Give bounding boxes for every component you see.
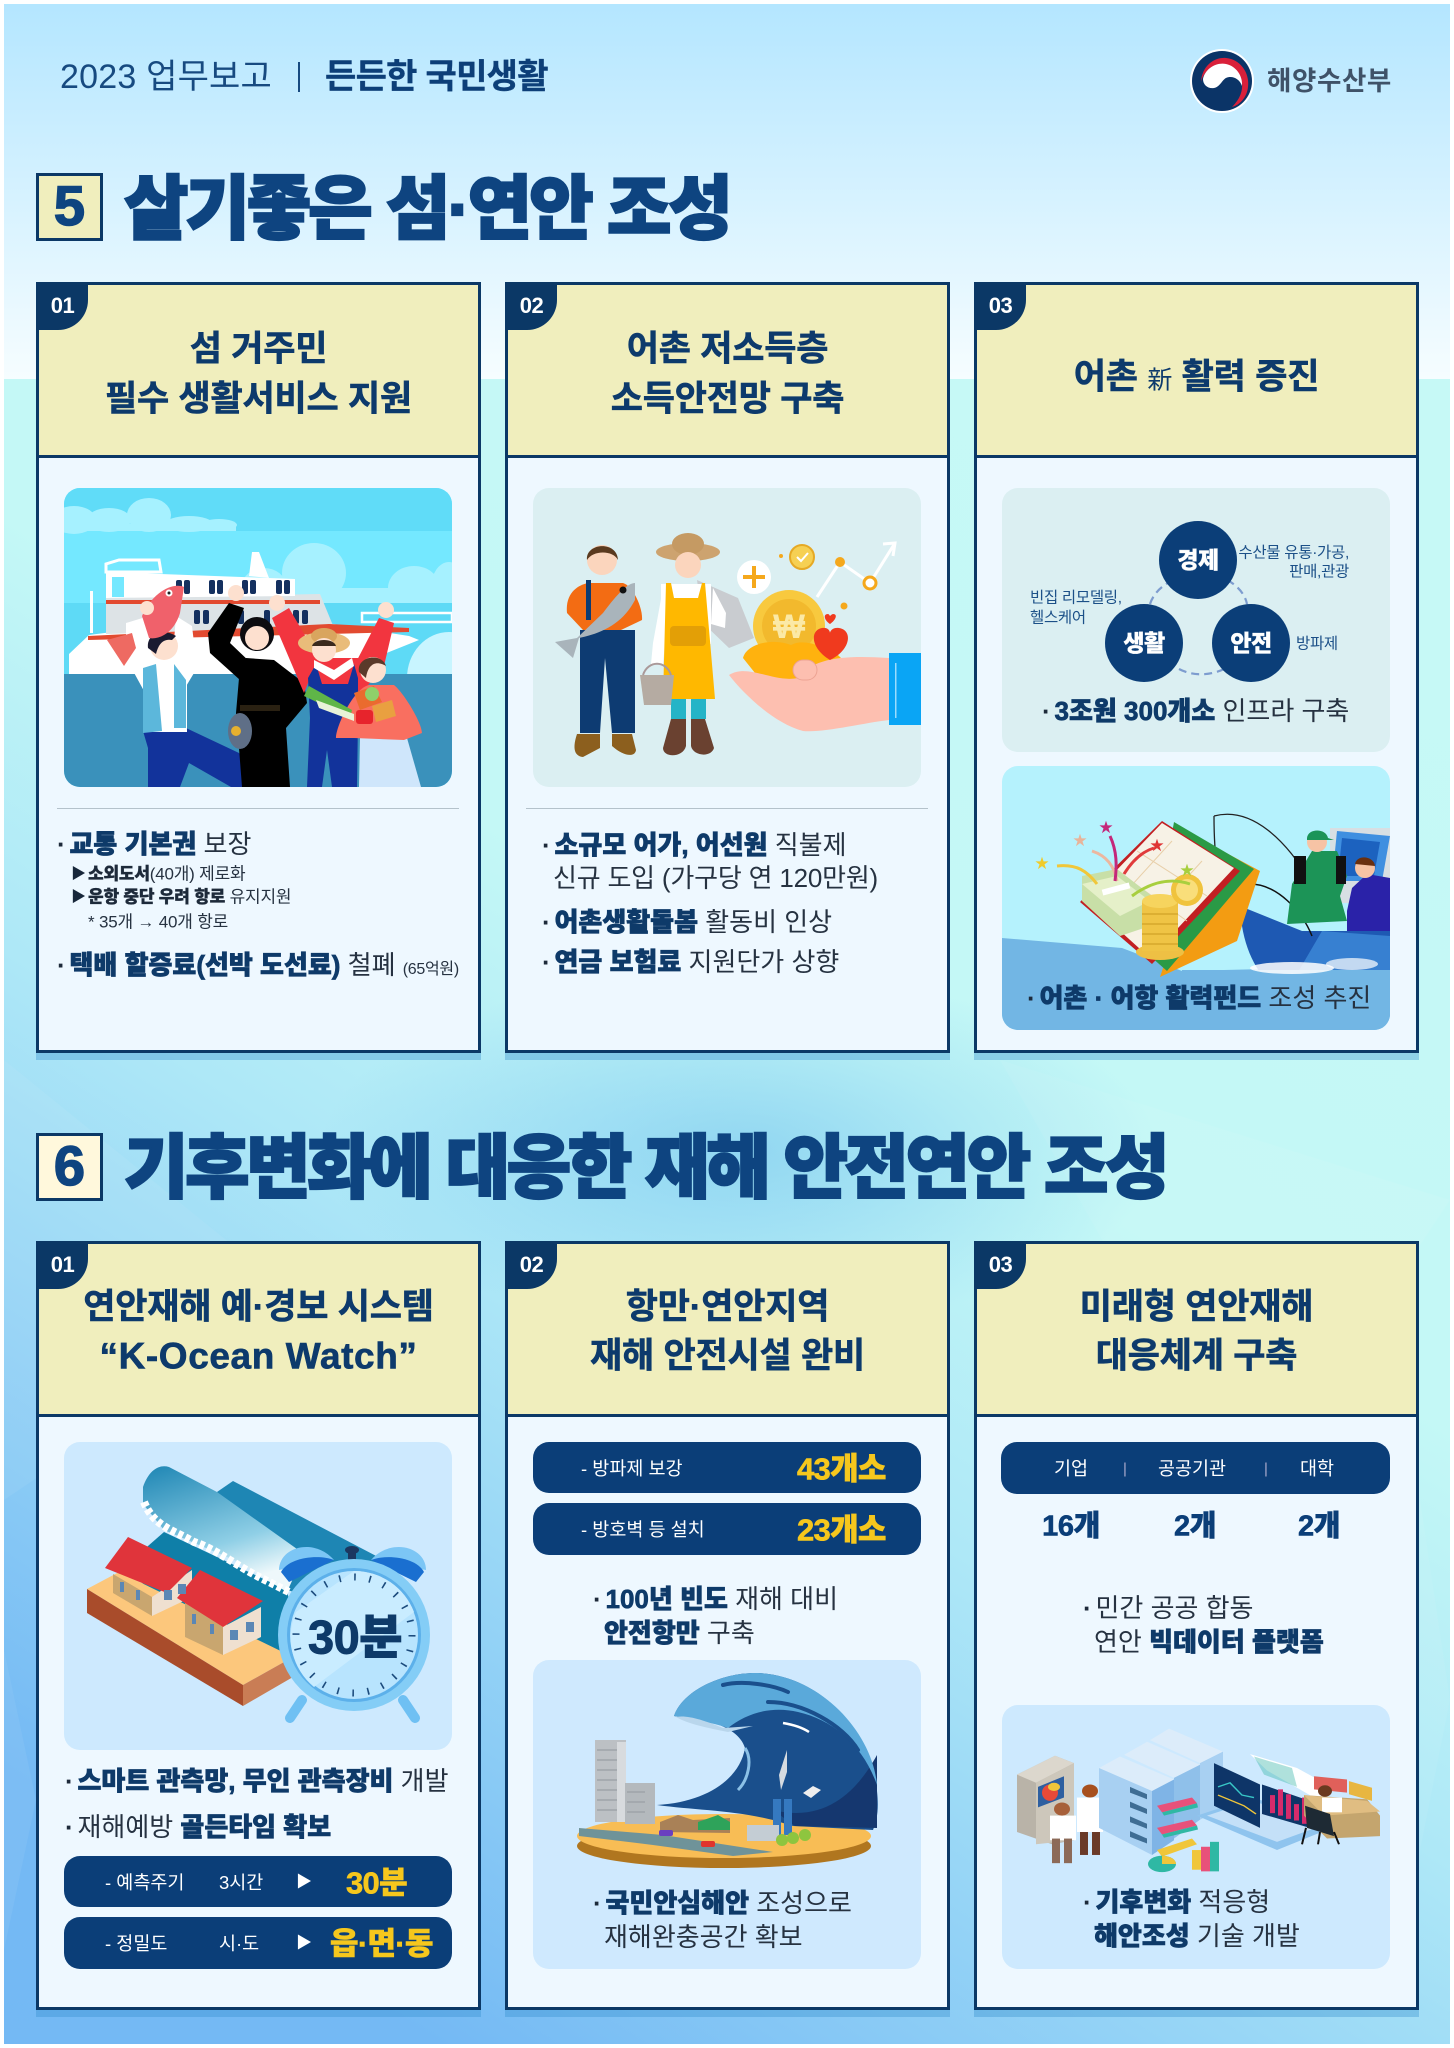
console and scientists <box>1017 1756 1103 1863</box>
bullet: 골든타임: · <box>65 1812 74 1842</box>
top label: 든든한 국민생활: 든든한 국민생활 <box>325 58 548 96</box>
bullet: 어촌생활돌봄: · <box>542 907 551 937</box>
to value: 30분 <box>346 1865 407 1900</box>
bullet: 교통 기본권 보장: 교통 기본권 보장 <box>70 829 251 859</box>
person: fisher with red fish <box>107 586 242 787</box>
badge 02 <box>505 1241 557 1289</box>
note: 35개 to 40개: * 35개 → 40개 항로 <box>88 912 228 932</box>
panel header <box>505 282 950 458</box>
value: 23개소 <box>797 1512 886 1548</box>
panel title line 2: 대응체계 구축 <box>1096 1336 1297 1376</box>
top label separator <box>298 62 300 92</box>
bullet: 100년 빈도: 100년 빈도 재해 대비 <box>606 1584 838 1614</box>
section 5 number: 5 <box>54 174 85 237</box>
label 기업: 기업 <box>1054 1458 1088 1479</box>
bullet: 100년 빈도: · <box>593 1584 602 1614</box>
bullet: 택배 할증료 철폐: · <box>57 950 66 980</box>
panel header <box>36 1241 481 1417</box>
circle: 안전: 안전 <box>1230 630 1272 656</box>
illustration: islanders in front of ferry <box>64 488 452 787</box>
circle: 경제 <box>1159 521 1237 599</box>
panel: 6-03 future response <box>974 1241 1419 2017</box>
bullet: 택배 할증료 철폐: 택배 할증료(선박 도선료) 철폐 (65억원) <box>70 950 459 980</box>
sub item: 소외도서 제로화: ▶ <box>71 866 86 882</box>
server racks <box>1099 1729 1223 1872</box>
diagram card: economy, life, safety <box>1002 488 1390 752</box>
ministry logo <box>1190 49 1392 113</box>
panel header <box>505 1241 950 1417</box>
houses <box>105 1537 263 1655</box>
analyst at desk <box>1302 1776 1380 1844</box>
bullet: 연금 보험료: · <box>542 947 551 977</box>
label 공공기관: 공공기관 <box>1158 1458 1226 1479</box>
count: 2개: 2개 <box>1174 1510 1216 1542</box>
bar: 정밀도 <box>64 1917 452 1969</box>
panel: 5-03 new vitality <box>974 282 1419 1060</box>
panel: 5-02 income safety net <box>505 282 950 1060</box>
wallet and money: ★ <box>1149 836 1165 855</box>
badge 03: 03 <box>989 1252 1012 1277</box>
laptop and charts <box>1197 1754 1342 1850</box>
label: - 방파제 보강 <box>581 1457 683 1478</box>
badge 01: 01 <box>51 293 74 318</box>
bullet: 어촌생활돌봄: 어촌생활돌봄 활동비 인상 <box>554 907 832 937</box>
bullet: 민간 공공 합동: 민간 공공 합동 <box>1096 1593 1253 1623</box>
sub item: 항로 유지지원: 운항 중단 우려 항로 유지지원 <box>88 888 291 906</box>
panel title line 1: 연안재해 예·경보 시스템 <box>83 1288 434 1326</box>
label: - 정밀도 <box>105 1933 167 1954</box>
count: 16개: 16개 <box>1042 1510 1100 1542</box>
bullet: 골든타임: 재해예방 골든타임 확보 <box>78 1812 331 1842</box>
panel title line 1: 미래형 연안재해 <box>1080 1288 1313 1326</box>
panel: 5-01 island residents <box>36 282 481 1060</box>
label: 수산물: 수산물 유통·가공, <box>1238 544 1349 561</box>
bullet continuation: 신규 도입 (가구당 연 120만원) <box>553 863 878 893</box>
land <box>87 1572 293 1706</box>
illustration: tsunami, houses and alarm clock <box>64 1442 452 1750</box>
ministry name: 해양수산부 <box>1267 66 1392 96</box>
caption: 3조원 300개소: 3조원 300개소 인프라 구축 <box>1054 696 1349 726</box>
label: - 예측주기 <box>105 1871 184 1892</box>
caption: 어촌 어항 활력펀드: · <box>1027 983 1036 1013</box>
circle: 생활: 생활 <box>1123 630 1165 656</box>
wallet and money: ★ <box>1179 861 1195 880</box>
caption continuation: 해안조성 기술 개발 <box>1094 1921 1300 1951</box>
from value: 시·도 <box>219 1933 259 1954</box>
bullet: 민간 공공 합동: · <box>1083 1593 1092 1623</box>
illustration: giant wave over coastal city <box>533 1660 921 1969</box>
bullet: 스마트 관측망: · <box>65 1766 74 1796</box>
circle: 경제: 경제 <box>1177 547 1219 573</box>
dashed links <box>1149 581 1248 676</box>
caption continuation: 재해완충공간 확보 <box>604 1922 803 1952</box>
bar: 예측주기 <box>64 1856 452 1907</box>
divider <box>526 808 928 809</box>
wallet and money: ★ <box>1098 818 1114 837</box>
section 6 title: 기후변화에 대응한 재해 안전연안 조성 <box>124 1129 1166 1207</box>
circle: 생활 <box>1105 604 1183 682</box>
person: woman with vegetables <box>304 657 422 787</box>
caption: 기후변화 적응형: 기후변화 적응형 <box>1096 1887 1270 1917</box>
badge 01 <box>36 1241 88 1289</box>
panel title line 1: 어촌 저소득층 <box>627 330 828 368</box>
divider <box>57 808 459 809</box>
woman with bucket and net <box>640 533 754 755</box>
panel header <box>974 1241 1419 1417</box>
panel header <box>974 282 1419 458</box>
label separator: | <box>1123 1460 1127 1478</box>
sub item: 항로 유지지원: ▶ <box>71 888 86 906</box>
caption: 국민안심해안: · <box>593 1888 602 1918</box>
bar: participants <box>1001 1442 1390 1494</box>
section 5 title: 살기좋은 섬·연안 조성 <box>124 170 730 248</box>
bullet continuation: 안전항만 구축 <box>604 1618 755 1648</box>
arrow: ▶ <box>296 1874 312 1890</box>
caption: 3조원 300개소: · <box>1042 696 1051 726</box>
helping hand with coin <box>729 543 921 731</box>
bullet: 스마트 관측망: 스마트 관측망, 무인 관측장비 개발 <box>78 1766 449 1796</box>
man with fish <box>555 545 642 757</box>
sub item: 소외도서 제로화: 소외도서(40개) 제로화 <box>88 864 245 884</box>
alarm clock <box>278 1546 430 1718</box>
label: 헬스케어: 헬스케어 <box>1030 609 1086 626</box>
caption: 기후변화 적응형: · <box>1083 1887 1092 1917</box>
panel header <box>36 282 481 458</box>
panel title line 1: 섬 거주민 <box>190 330 327 368</box>
bullet continuation: 연안 빅데이터 플랫폼 <box>1094 1627 1324 1657</box>
section 6 number <box>36 1133 103 1201</box>
section 5 number <box>36 173 103 241</box>
illustration card: fund and fishing boat <box>1002 766 1390 1030</box>
person: diver <box>208 585 307 787</box>
section 6 number: 6 <box>54 1134 85 1197</box>
bar: 방호벽 등 설치 <box>533 1503 921 1555</box>
panel title line 2: 필수 생활서비스 지원 <box>105 380 412 418</box>
label: 빈집: 빈집 리모델링, <box>1030 589 1122 606</box>
helping hand with coin: ₩ <box>773 608 806 646</box>
badge 01: 01 <box>51 1252 74 1277</box>
badge 01 <box>36 282 88 330</box>
label: 방파제: 방파제 <box>1296 635 1338 652</box>
person: farmer in overalls <box>269 595 394 787</box>
label: 판매: 판매,관광 <box>1289 563 1349 580</box>
wallet and money: ★ <box>1072 831 1088 850</box>
illustration: data center and analysts <box>1002 1705 1390 1969</box>
value: 43개소 <box>797 1451 886 1486</box>
arrow: ▶ <box>296 1935 312 1952</box>
bullet: 소규모 어가, 어선원 직불제: 소규모 어가, 어선원 직불제 <box>554 830 847 860</box>
badge 02: 02 <box>520 1252 543 1277</box>
badge 02: 02 <box>520 293 543 318</box>
wave <box>124 1466 380 1660</box>
clock label: 30분: 30분 <box>308 1610 402 1664</box>
panel title line 2: 재해 안전시설 완비 <box>590 1336 865 1376</box>
label: - 방호벽 등 설치 <box>581 1519 705 1540</box>
bullet: 소규모 어가, 어선원 직불제: · <box>542 830 551 860</box>
count: 2개: 2개 <box>1298 1510 1340 1542</box>
badge 03: 03 <box>989 293 1012 318</box>
panel: 6-01 K-Ocean Watch <box>36 1241 481 2017</box>
panel: 6-02 safety facilities <box>505 1241 950 2017</box>
bar: 방파제 보강 <box>533 1442 921 1493</box>
caption: 어촌 어항 활력펀드: 어촌 · 어항 활력펀드 조성 추진 <box>1040 983 1371 1013</box>
island <box>577 1814 871 1868</box>
bullet: 연금 보험료: 연금 보험료 지원단가 상향 <box>554 947 839 977</box>
panel title: 어촌 新 활력 증진 <box>1074 358 1319 396</box>
buildings <box>595 1740 811 1847</box>
boat <box>1182 814 1390 1030</box>
label 대학: 대학 <box>1300 1458 1334 1479</box>
badge 03 <box>974 282 1026 330</box>
badge 03 <box>974 1241 1026 1289</box>
top label: 2023 업무보고: 2023 업무보고 <box>60 58 272 96</box>
icon: taegeuk emblem <box>1190 49 1254 113</box>
panel title line 2: 소득안전망 구축 <box>611 380 844 418</box>
to value: 읍·면·동 <box>330 1926 433 1962</box>
wallet and money: ★ <box>1034 854 1050 873</box>
bullet: 교통 기본권 보장: · <box>57 829 66 859</box>
badge 02 <box>505 282 557 330</box>
caption: 국민안심해안: 국민안심해안 조성으로 <box>606 1888 852 1918</box>
from value: 3시간 <box>219 1871 263 1892</box>
label separator: | <box>1264 1460 1268 1478</box>
illustration: money and boat <box>1002 814 1390 1030</box>
circle: 안전 <box>1212 604 1290 682</box>
wave <box>657 1673 878 1830</box>
panel title line 2: “K-Ocean Watch” <box>99 1336 418 1376</box>
panel title line 1: 항만·연안지역 <box>626 1288 829 1326</box>
wallet and money <box>1034 818 1260 977</box>
illustration: fishers and helping hand <box>533 488 921 787</box>
